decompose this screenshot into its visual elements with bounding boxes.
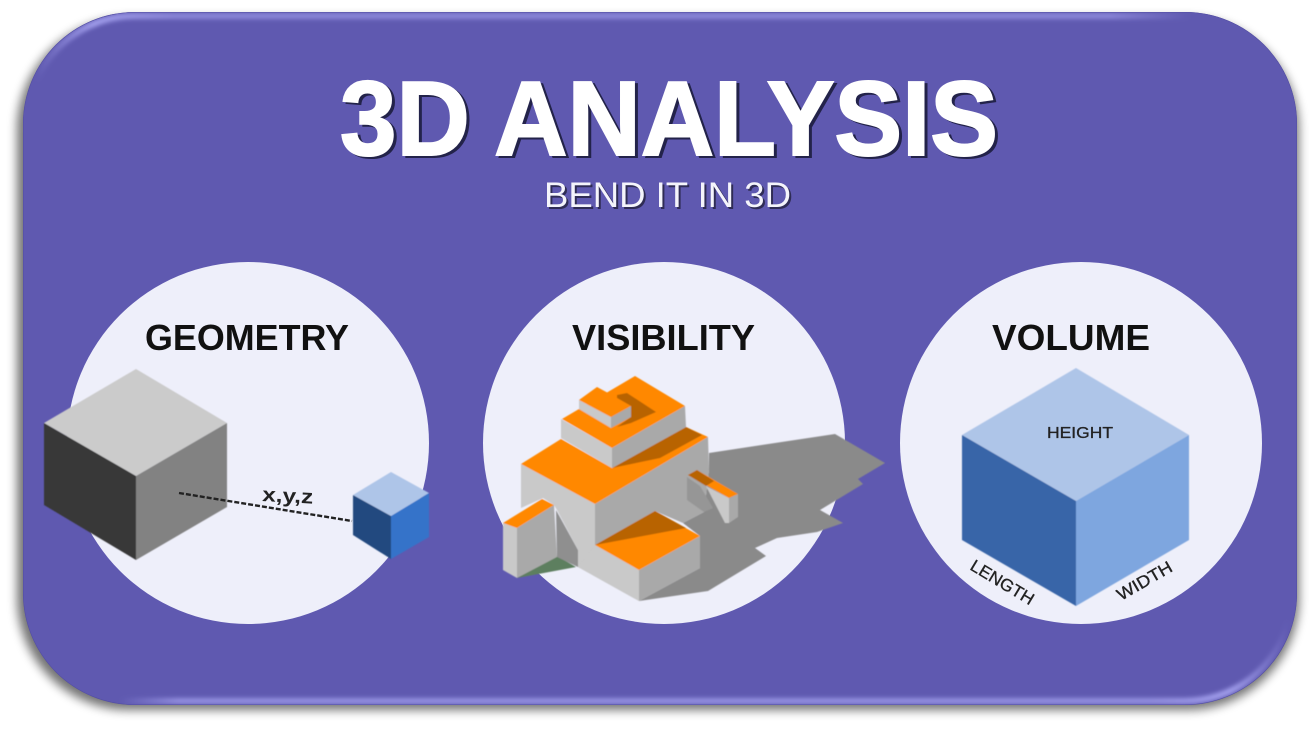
middle tier: [561, 419, 612, 468]
subtitle: BEND IT IN 3D: [544, 176, 791, 215]
dashed connector: [179, 493, 352, 521]
title: 3D ANALYSIS: [340, 60, 998, 178]
left wall: [503, 523, 517, 578]
volume circle: [900, 262, 1262, 624]
icon: large grey cube: [44, 369, 227, 560]
length label: LENGTH: [967, 556, 1038, 609]
panel: visibility: [483, 262, 885, 624]
visibility heading: VISIBILITY: [572, 317, 755, 358]
geometry heading: GEOMETRY: [145, 317, 349, 358]
green shadow on ground: [517, 556, 576, 578]
top tier: [579, 400, 611, 428]
geometry circle: [67, 262, 429, 624]
height label: HEIGHT: [1047, 425, 1113, 442]
main block walls: [521, 464, 639, 601]
coordinates label: x,y,z: [262, 484, 314, 509]
volume heading: VOLUME: [992, 317, 1150, 358]
width label: WIDTH: [1114, 558, 1176, 604]
cast shadow: [639, 434, 885, 601]
icon: blue cube: [962, 368, 1189, 606]
icon: small blue cube: [353, 472, 429, 559]
title: 3D ANALYSIS: [343, 62, 1001, 180]
panel: geometry: [44, 262, 429, 624]
visibility circle: [483, 262, 845, 624]
right wall: [687, 477, 713, 512]
panel: volume: [900, 262, 1262, 624]
main block roof: [521, 427, 708, 504]
front block: [578, 545, 639, 601]
subtitle: BEND IT IN 3D: [546, 178, 793, 217]
icon: isometric building with cast shadow: [503, 376, 885, 601]
shaded courtyard wall: [556, 510, 578, 567]
